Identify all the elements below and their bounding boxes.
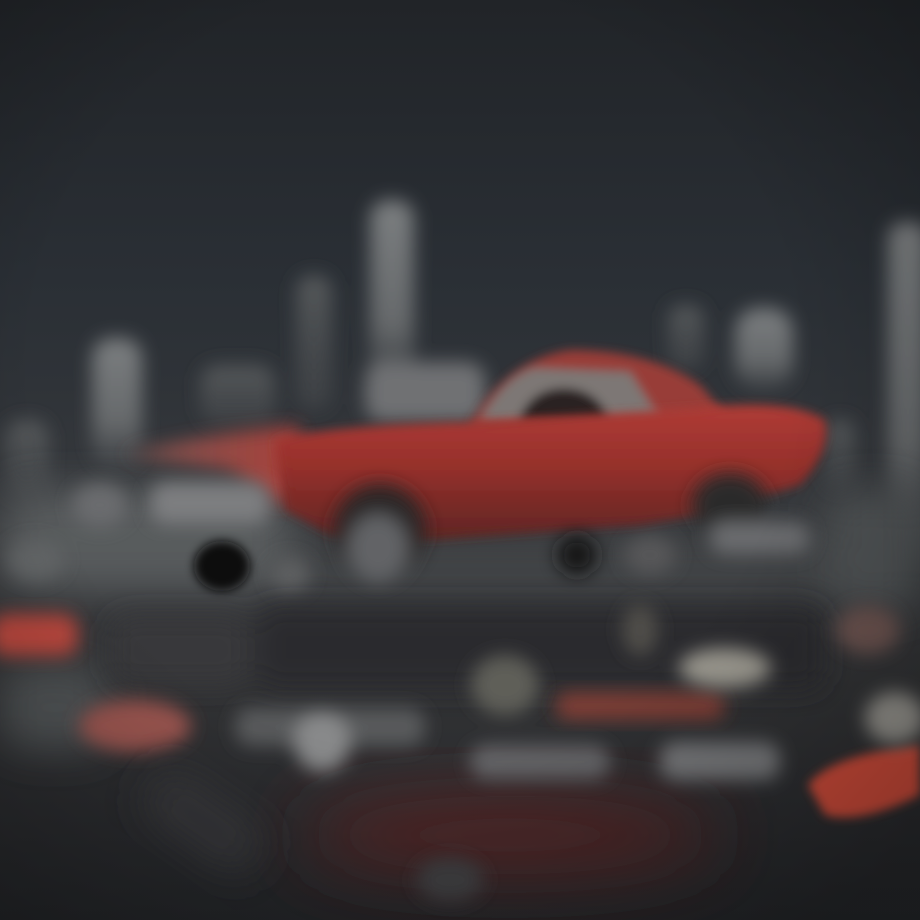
red piece: left [0, 614, 78, 656]
red piece: centre right [555, 692, 725, 720]
wheel: rear [557, 473, 810, 575]
red floor reflection [300, 795, 720, 875]
lower left grey clutter [0, 490, 920, 750]
car [125, 350, 826, 591]
car body [275, 405, 826, 540]
small grey blobs on the left [7, 483, 676, 593]
red piece: right [836, 606, 900, 654]
wheel: arch grey [334, 484, 426, 582]
red piece: lower right [808, 745, 920, 818]
car hood [125, 426, 300, 505]
pale debris [235, 604, 920, 902]
wheel: front dark [194, 541, 250, 591]
skyline towers [5, 200, 920, 562]
dark platform under car [110, 605, 825, 690]
red piece: lower left [79, 700, 191, 752]
dark diagonal smear [135, 762, 273, 882]
car roof and windows [470, 350, 730, 430]
car front bumper [150, 482, 270, 524]
